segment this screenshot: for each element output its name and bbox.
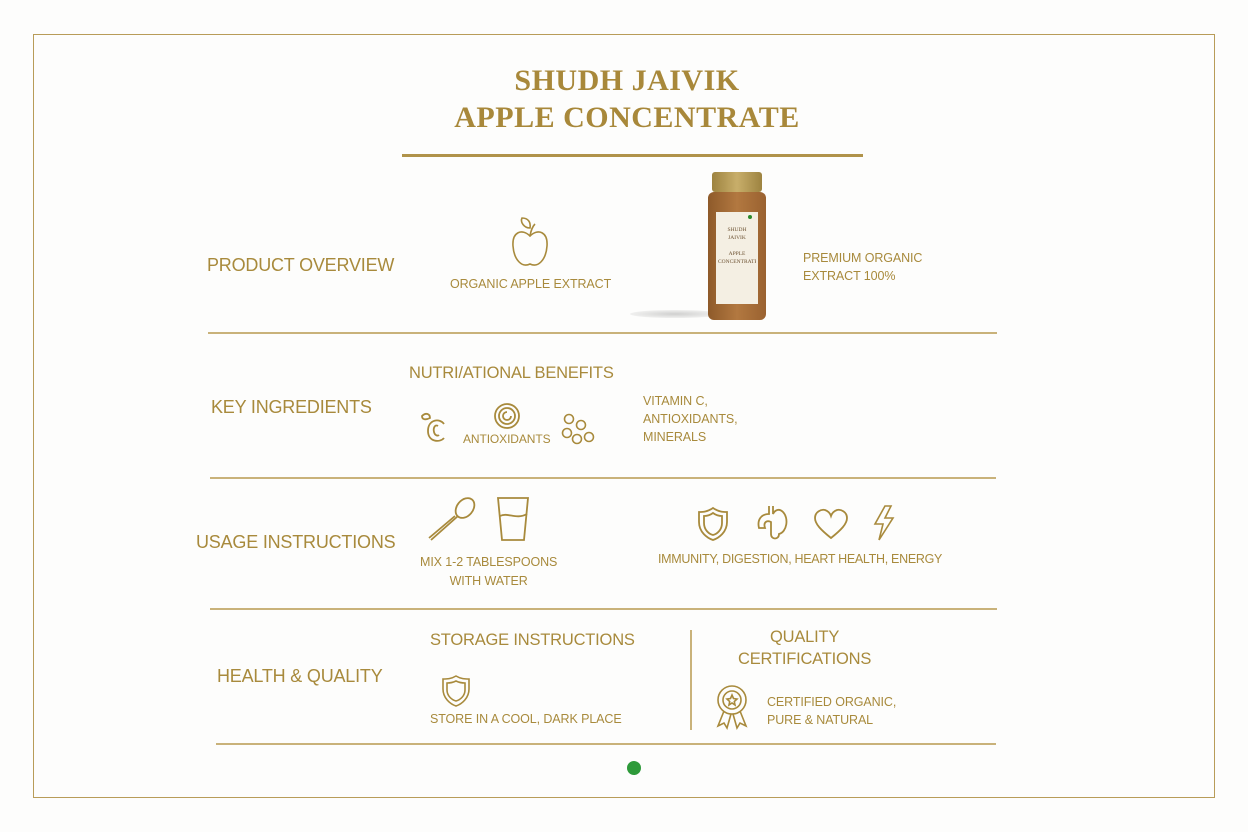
icon: heart [814, 508, 848, 540]
text: certified organic: PURE & NATURAL [767, 713, 873, 727]
text: mix instructions: WITH WATER [450, 574, 528, 588]
icon: minerals [562, 414, 594, 444]
product bottle: APPLE [729, 251, 745, 257]
icon: vitamin c [421, 412, 445, 442]
icon: lightning [874, 505, 894, 540]
title: APPLE CONCENTRATE [454, 101, 800, 134]
text: antioxidants: ANTIOXIDANTS [463, 432, 550, 446]
section: usage instructions [196, 497, 942, 588]
heading: health & quality: HEALTH & QUALITY [217, 666, 383, 686]
title [454, 64, 800, 134]
icon: storage shield [442, 675, 470, 707]
heading: product overview: PRODUCT OVERVIEW [207, 255, 394, 275]
icon: certification badge [716, 685, 748, 730]
icons: benefits [698, 505, 894, 541]
icon: antioxidants swirl [494, 403, 520, 429]
icon: spoon [428, 497, 476, 541]
subheading: storage instructions: STORAGE INSTRUCTIONS [430, 631, 635, 649]
text: organic apple extract: ORGANIC APPLE EXTRACT [450, 277, 611, 291]
text: premium organic extract: EXTRACT 100% [803, 269, 895, 283]
text: certified organic [767, 695, 896, 727]
section: health & quality [217, 628, 896, 730]
divider vertical [690, 630, 692, 730]
green dot [627, 761, 641, 775]
text: vitamin list: ANTIOXIDANTS, [643, 412, 738, 426]
text: vitamin list [643, 394, 738, 444]
heading: key ingredients: KEY INGREDIENTS [211, 397, 372, 417]
title underline [402, 154, 863, 157]
title: SHUDH JAIVIK [514, 64, 740, 97]
icon: shield [698, 507, 728, 541]
section: product overview [207, 172, 922, 320]
text: mix instructions: MIX 1-2 TABLESPOONS [420, 555, 557, 569]
text: benefits list: IMMUNITY, DIGESTION, HEART HEALTH, ENERGY [658, 552, 942, 566]
subheading: quality certifications: CERTIFICATIONS [738, 650, 871, 668]
text: storage: STORE IN A COOL, DARK PLACE [430, 712, 622, 726]
subheading: quality certifications [738, 628, 871, 668]
text: vitamin list: VITAMIN C, [643, 394, 708, 408]
product bottle [630, 172, 766, 320]
product bottle: SHUDH [728, 227, 746, 233]
section: key ingredients [211, 364, 738, 446]
text: certified organic: CERTIFIED ORGANIC, [767, 695, 896, 709]
subheading: nutritional benefits: NUTRI/ATIONAL BENEFITS [409, 364, 614, 382]
icon: glass of water [497, 497, 529, 541]
product bottle: JAIVIK [728, 235, 746, 241]
subheading: quality certifications: QUALITY [770, 628, 839, 646]
text: vitamin list: MINERALS [643, 430, 706, 444]
text: premium organic extract [803, 251, 922, 283]
heading: usage instructions: USAGE INSTRUCTIONS [196, 532, 395, 552]
text: mix instructions [420, 555, 557, 588]
icon: stomach [758, 506, 788, 540]
icon: apple [512, 217, 548, 266]
text: premium organic extract: PREMIUM ORGANIC [803, 251, 922, 265]
